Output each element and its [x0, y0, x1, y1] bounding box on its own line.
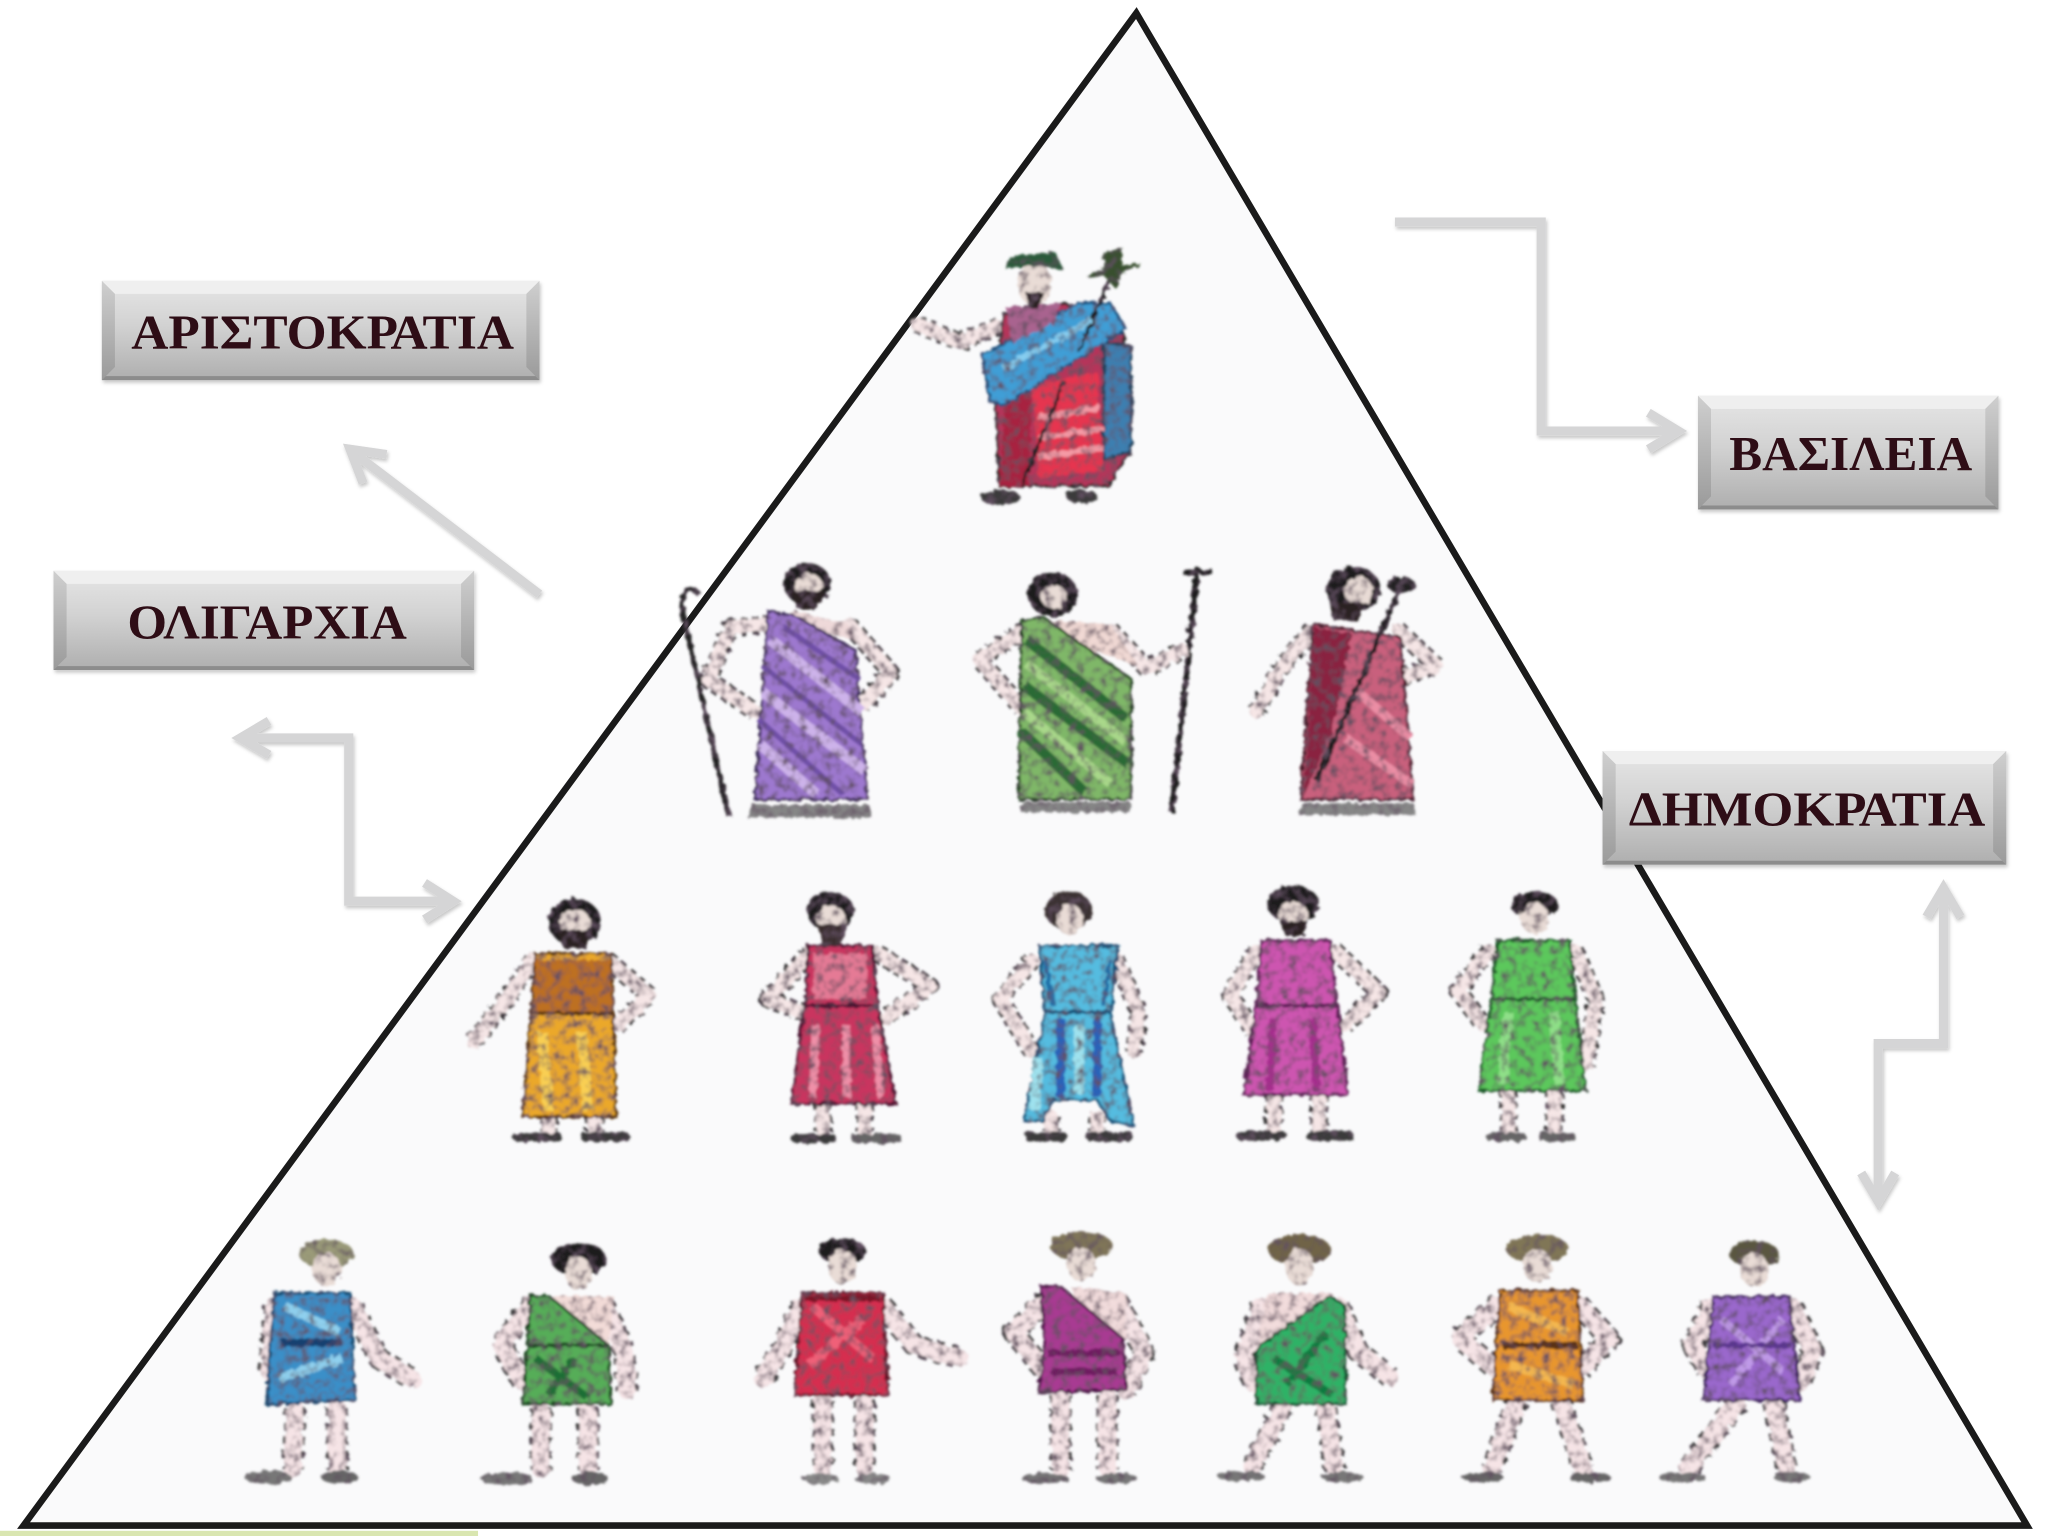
tier 3: crimson tunic figure — [768, 892, 930, 1143]
label: Βασιλεία — [1698, 396, 1998, 509]
tier 4: magenta tunic figure — [1014, 1232, 1144, 1484]
tier 4: green tunic figure — [481, 1242, 627, 1485]
label: Δημοκρατία: ΔΗΜΟΚΡΑΤΙΑ — [1629, 783, 1985, 836]
tier 4: emerald tunic figure — [1217, 1234, 1390, 1482]
label: Δημοκρατία — [1603, 751, 2006, 865]
arrow: to Αριστοκρατία — [350, 449, 539, 594]
arrow: double-headed to Ολιγαρχία — [240, 721, 453, 920]
label: Βασιλεία: ΒΑΣΙΛΕΙΑ — [1729, 428, 1972, 481]
tier 3: green tunic figure — [1458, 891, 1596, 1142]
tier 3: orange tunic figure — [473, 899, 649, 1142]
tier 2: maroon robed figure with staff — [1256, 567, 1437, 815]
tier 4: orange tunic figure — [1460, 1234, 1610, 1482]
tier 4: blue tunic figure — [244, 1240, 413, 1484]
arrow: double-headed to Δημοκρατία — [1861, 888, 1960, 1202]
tier 3: blue dress figure — [1000, 891, 1139, 1142]
tier 3: magenta tunic figure — [1230, 886, 1379, 1140]
label: Αριστοκρατία — [102, 281, 539, 380]
tier 4: red tunic figure — [763, 1238, 960, 1484]
tier 2: purple robed figure with staff — [682, 563, 891, 818]
tier 2: green robed figure with staff — [980, 568, 1212, 812]
tier 1: king figure — [917, 248, 1142, 505]
label: Ολιγαρχία — [54, 571, 474, 670]
arrow: to Βασιλεία — [1395, 222, 1678, 449]
label: Αριστοκρατία: ΑΡΙΣΤΟΚΡΑΤΙΑ — [131, 307, 514, 360]
base accent bar — [0, 1531, 478, 1536]
label: Ολιγαρχία: ΟΛΙΓΑΡΧΙΑ — [127, 597, 407, 650]
tier 4: purple tunic figure — [1659, 1241, 1813, 1482]
